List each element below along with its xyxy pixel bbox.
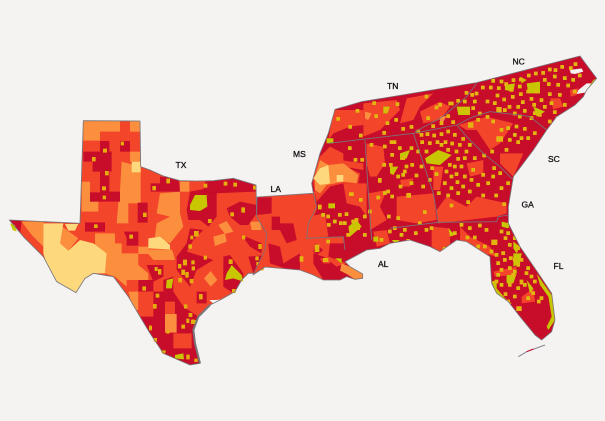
Southeast states counties <box>250 50 603 357</box>
Texas outline <box>9 121 268 365</box>
Texas city markers <box>92 142 278 362</box>
label: NC: NC <box>512 56 525 66</box>
map of southeastern states <box>8 56 597 366</box>
Southeast outline <box>253 56 597 340</box>
state borders <box>307 83 547 250</box>
label: GA: GA <box>522 200 534 210</box>
Southeast extra city markers <box>322 75 575 300</box>
Texas coastal barrier edge <box>193 305 210 363</box>
label: SC: SC <box>548 154 560 164</box>
Florida Keys <box>518 345 545 357</box>
Southeast urban areas <box>327 77 597 330</box>
label: MS: MS <box>293 149 306 159</box>
Texas counties <box>8 120 266 366</box>
Southeast city markers <box>300 63 581 311</box>
label: FL: FL <box>554 261 564 271</box>
label: LA: LA <box>270 184 281 194</box>
label: TN: TN <box>387 81 398 91</box>
label: AL: AL <box>378 259 389 269</box>
label: TX: TX <box>176 160 187 170</box>
Texas urban areas <box>10 195 243 359</box>
